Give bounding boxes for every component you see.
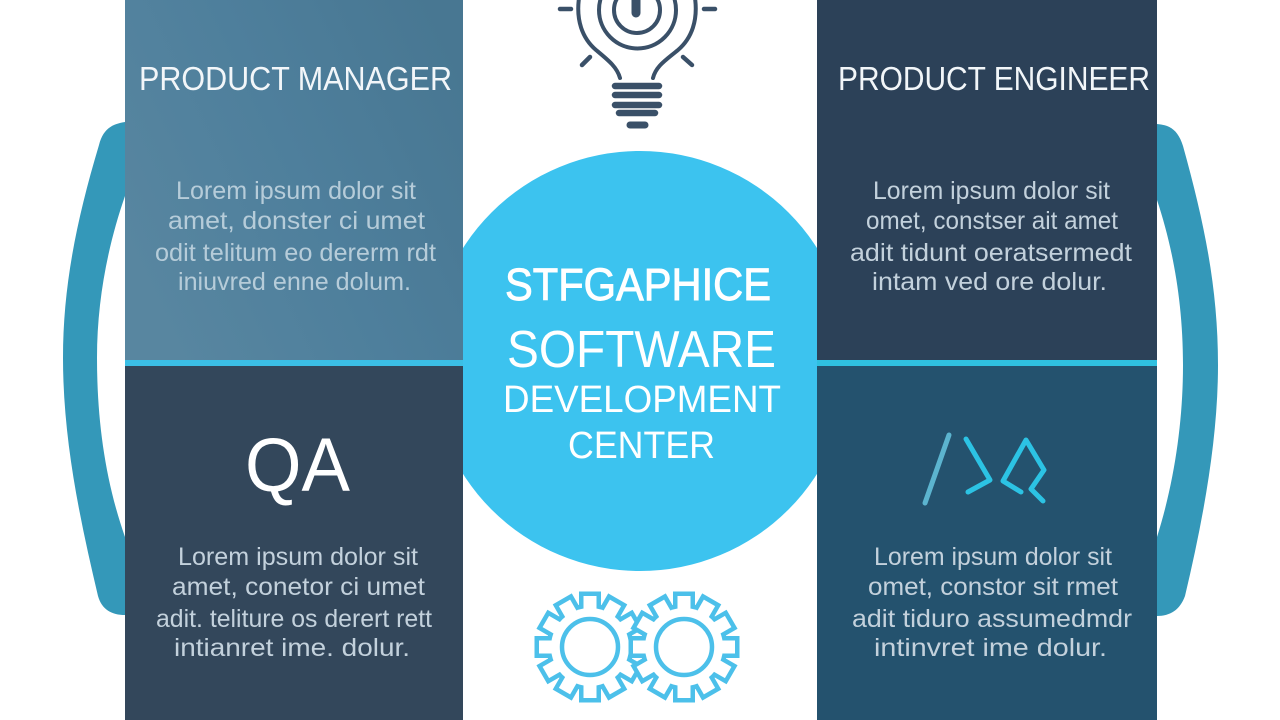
circle title text: SOFTWARE — [507, 321, 776, 379]
text block: product engineer body: Lorem ipsum dolor sit — [873, 177, 1110, 205]
icon: light bulb — [560, 0, 715, 125]
right divider — [817, 360, 1157, 366]
text block: code body: Lorem ipsum dolor sit — [874, 543, 1112, 571]
panel: product engineer — [817, 0, 1157, 360]
circle title text: DEVELOPMENT — [503, 379, 781, 421]
text block: QA body: Lorem ipsum dolor sit — [178, 543, 418, 571]
panel: code — [817, 366, 1157, 720]
panel: product manager — [125, 0, 463, 360]
heading: QA: QA — [245, 423, 350, 508]
circle title text — [503, 259, 781, 467]
text block: code body: adit tiduro assumedmdr — [852, 605, 1132, 633]
text block: QA body — [156, 543, 432, 662]
text block: QA body: intianret ime. dolur. — [174, 634, 410, 662]
icon: gears — [539, 596, 735, 698]
text block: QA body: amet, conetor ci umet — [172, 573, 425, 601]
heading: product engineer: PRODUCT ENGINEER — [838, 60, 1150, 97]
text block: product engineer body: omet, constser ait amet — [866, 207, 1118, 235]
panel: QA — [125, 366, 463, 720]
text block: product engineer body: adit tidunt oeratsermedt — [850, 239, 1132, 267]
text block: product manager body — [155, 177, 436, 296]
text block: product manager body: odit telitum eo dererm rdt — [155, 239, 436, 267]
text block: product engineer body: intam ved ore dolur. — [872, 268, 1107, 296]
text block: product manager body: amet, donster ci umet — [168, 207, 425, 235]
text block: product engineer body — [850, 177, 1132, 296]
text block: product manager body: Lorem ipsum dolor sit — [176, 177, 416, 205]
icon: code glyphs — [925, 435, 1044, 503]
heading: product manager: PRODUCT MANAGER — [139, 60, 452, 97]
text block: QA body: adit. teliture os derert rett — [156, 605, 432, 633]
right arc bracket — [1157, 124, 1218, 616]
text block: code body — [852, 543, 1132, 662]
circle title text: CENTER — [568, 425, 715, 467]
text block: code body: omet, constor sit rmet — [868, 573, 1118, 601]
circle title text: STFGAPHICE — [505, 259, 771, 310]
left arc bracket — [63, 122, 125, 615]
text block: product manager body: iniuvred enne dolum. — [178, 268, 411, 296]
text block: code body: intinvret ime dolur. — [874, 634, 1107, 662]
central circle — [430, 151, 850, 571]
left divider — [125, 360, 463, 366]
